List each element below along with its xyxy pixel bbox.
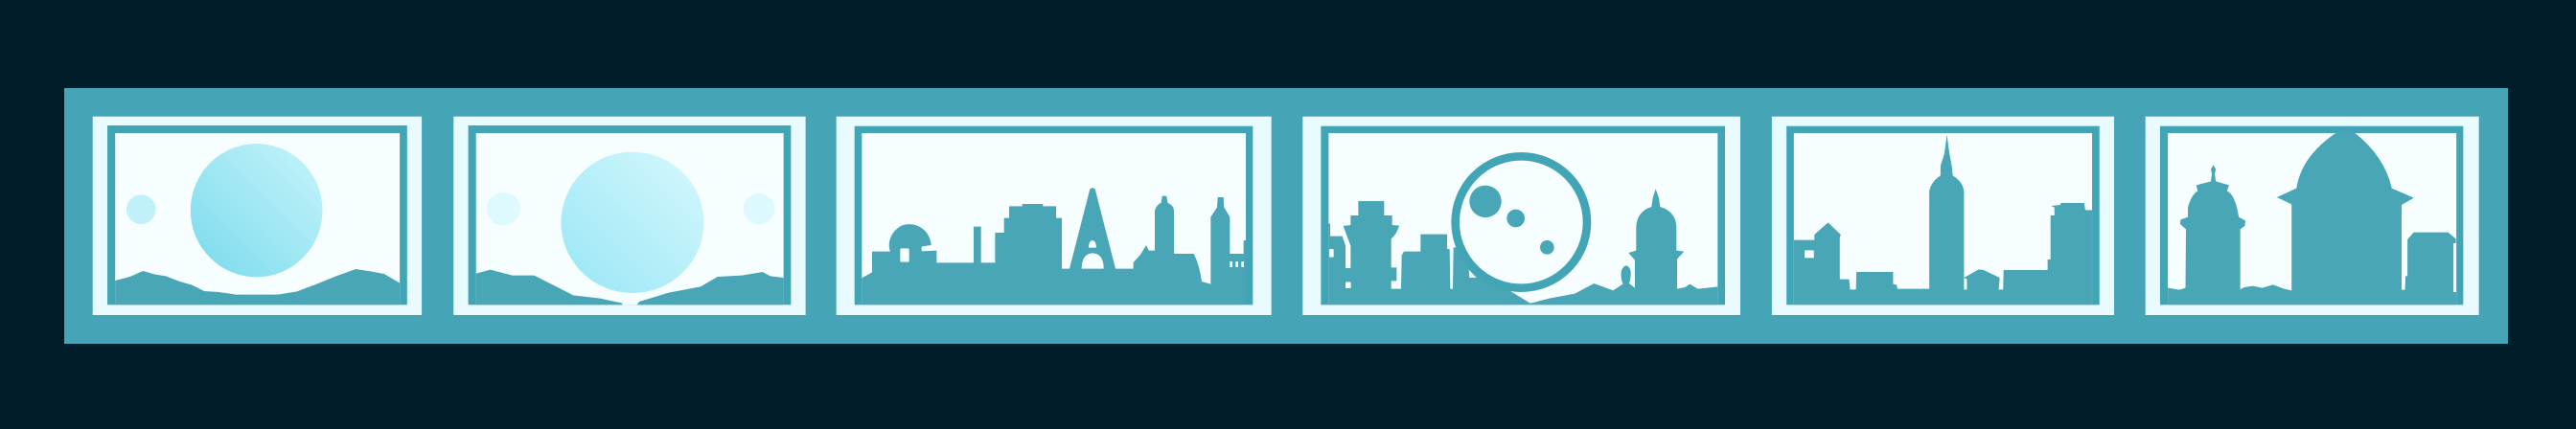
moon	[191, 144, 323, 277]
skyline silhouette	[1794, 135, 2092, 305]
left small moon	[486, 192, 520, 225]
panel: city skyline with tower	[837, 117, 1272, 315]
moon	[562, 152, 703, 293]
valley silhouette	[476, 270, 784, 305]
panel: mountains with moon	[93, 117, 422, 315]
ring moon	[1456, 156, 1587, 288]
dome silhouette	[2168, 133, 2456, 305]
window	[1805, 250, 1814, 258]
craters	[1469, 186, 1554, 255]
panel: domed buildings	[2146, 117, 2479, 315]
skyline silhouette	[1328, 189, 1717, 305]
mountain silhouette	[115, 269, 400, 305]
panel: valley with moon	[453, 117, 806, 315]
panel: skyline with ringed moon	[1302, 117, 1740, 315]
small moon	[126, 194, 156, 224]
windows	[1329, 249, 1477, 288]
right small moon	[744, 193, 774, 224]
windows and arches	[900, 240, 1244, 269]
skyline silhouette	[862, 188, 1246, 305]
teal band	[64, 88, 2508, 344]
panel: skyscraper skyline	[1772, 117, 2114, 315]
